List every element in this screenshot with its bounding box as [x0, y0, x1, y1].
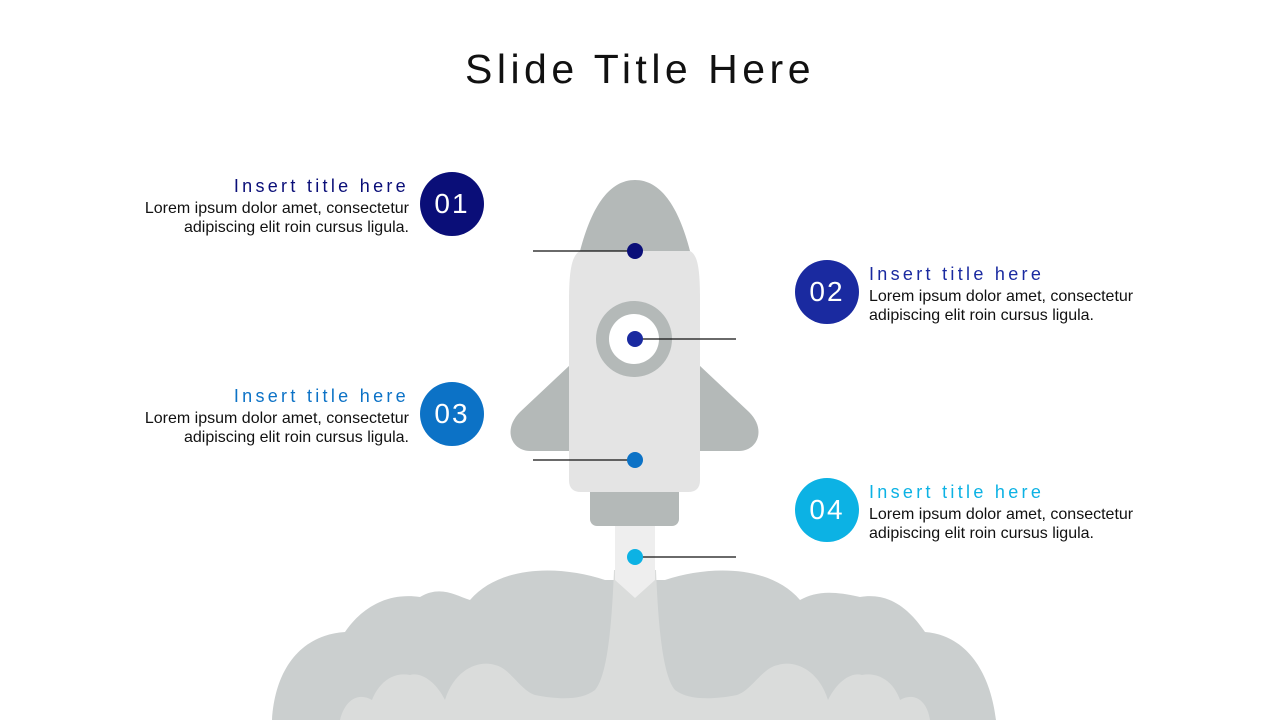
item 04 text: Lorem ipsum dolor amet, consectetur: [869, 506, 1133, 523]
item 04 number: 04: [809, 494, 845, 525]
item 04: [795, 478, 1133, 542]
item 04 text: [869, 482, 1133, 542]
nose: [580, 180, 690, 251]
item 03 number: [420, 382, 484, 446]
item 01 text: Lorem ipsum dolor amet, consectetur: [145, 200, 409, 217]
smoke cloud: [272, 570, 996, 720]
item 02 number: 02: [809, 276, 845, 307]
item 03 text: Insert title here: [234, 386, 409, 406]
flame: [615, 526, 655, 598]
item 02 text: Insert title here: [869, 264, 1044, 284]
item 03 text: [145, 386, 409, 446]
item 02: [795, 260, 1133, 324]
item 02 number: [795, 260, 859, 324]
item 03 text: adipiscing elit roin cursus ligula.: [184, 429, 409, 446]
fins: [511, 365, 572, 451]
body: [569, 251, 700, 492]
item 03 text: Lorem ipsum dolor amet, consectetur: [145, 410, 409, 427]
item 01 text: [145, 176, 409, 236]
item 02 text: Lorem ipsum dolor amet, consectetur: [869, 288, 1133, 305]
item 03 number: 03: [434, 398, 470, 429]
item 02 text: adipiscing elit roin cursus ligula.: [869, 307, 1094, 324]
item 01 number: 01: [434, 188, 470, 219]
nozzle: [590, 480, 679, 526]
item 01 text: adipiscing elit roin cursus ligula.: [184, 219, 409, 236]
connector lines and dots: [533, 251, 736, 557]
item 01: [145, 172, 484, 236]
item 03: [145, 382, 484, 446]
item 04 text: adipiscing elit roin cursus ligula.: [869, 525, 1094, 542]
title: Slide Title Here: [465, 46, 815, 92]
window: [596, 301, 672, 377]
item 04 text: Insert title here: [869, 482, 1044, 502]
item 01 text: Insert title here: [234, 176, 409, 196]
item 04 number: [795, 478, 859, 542]
item 02 text: [869, 264, 1133, 324]
item 01 number: [420, 172, 484, 236]
